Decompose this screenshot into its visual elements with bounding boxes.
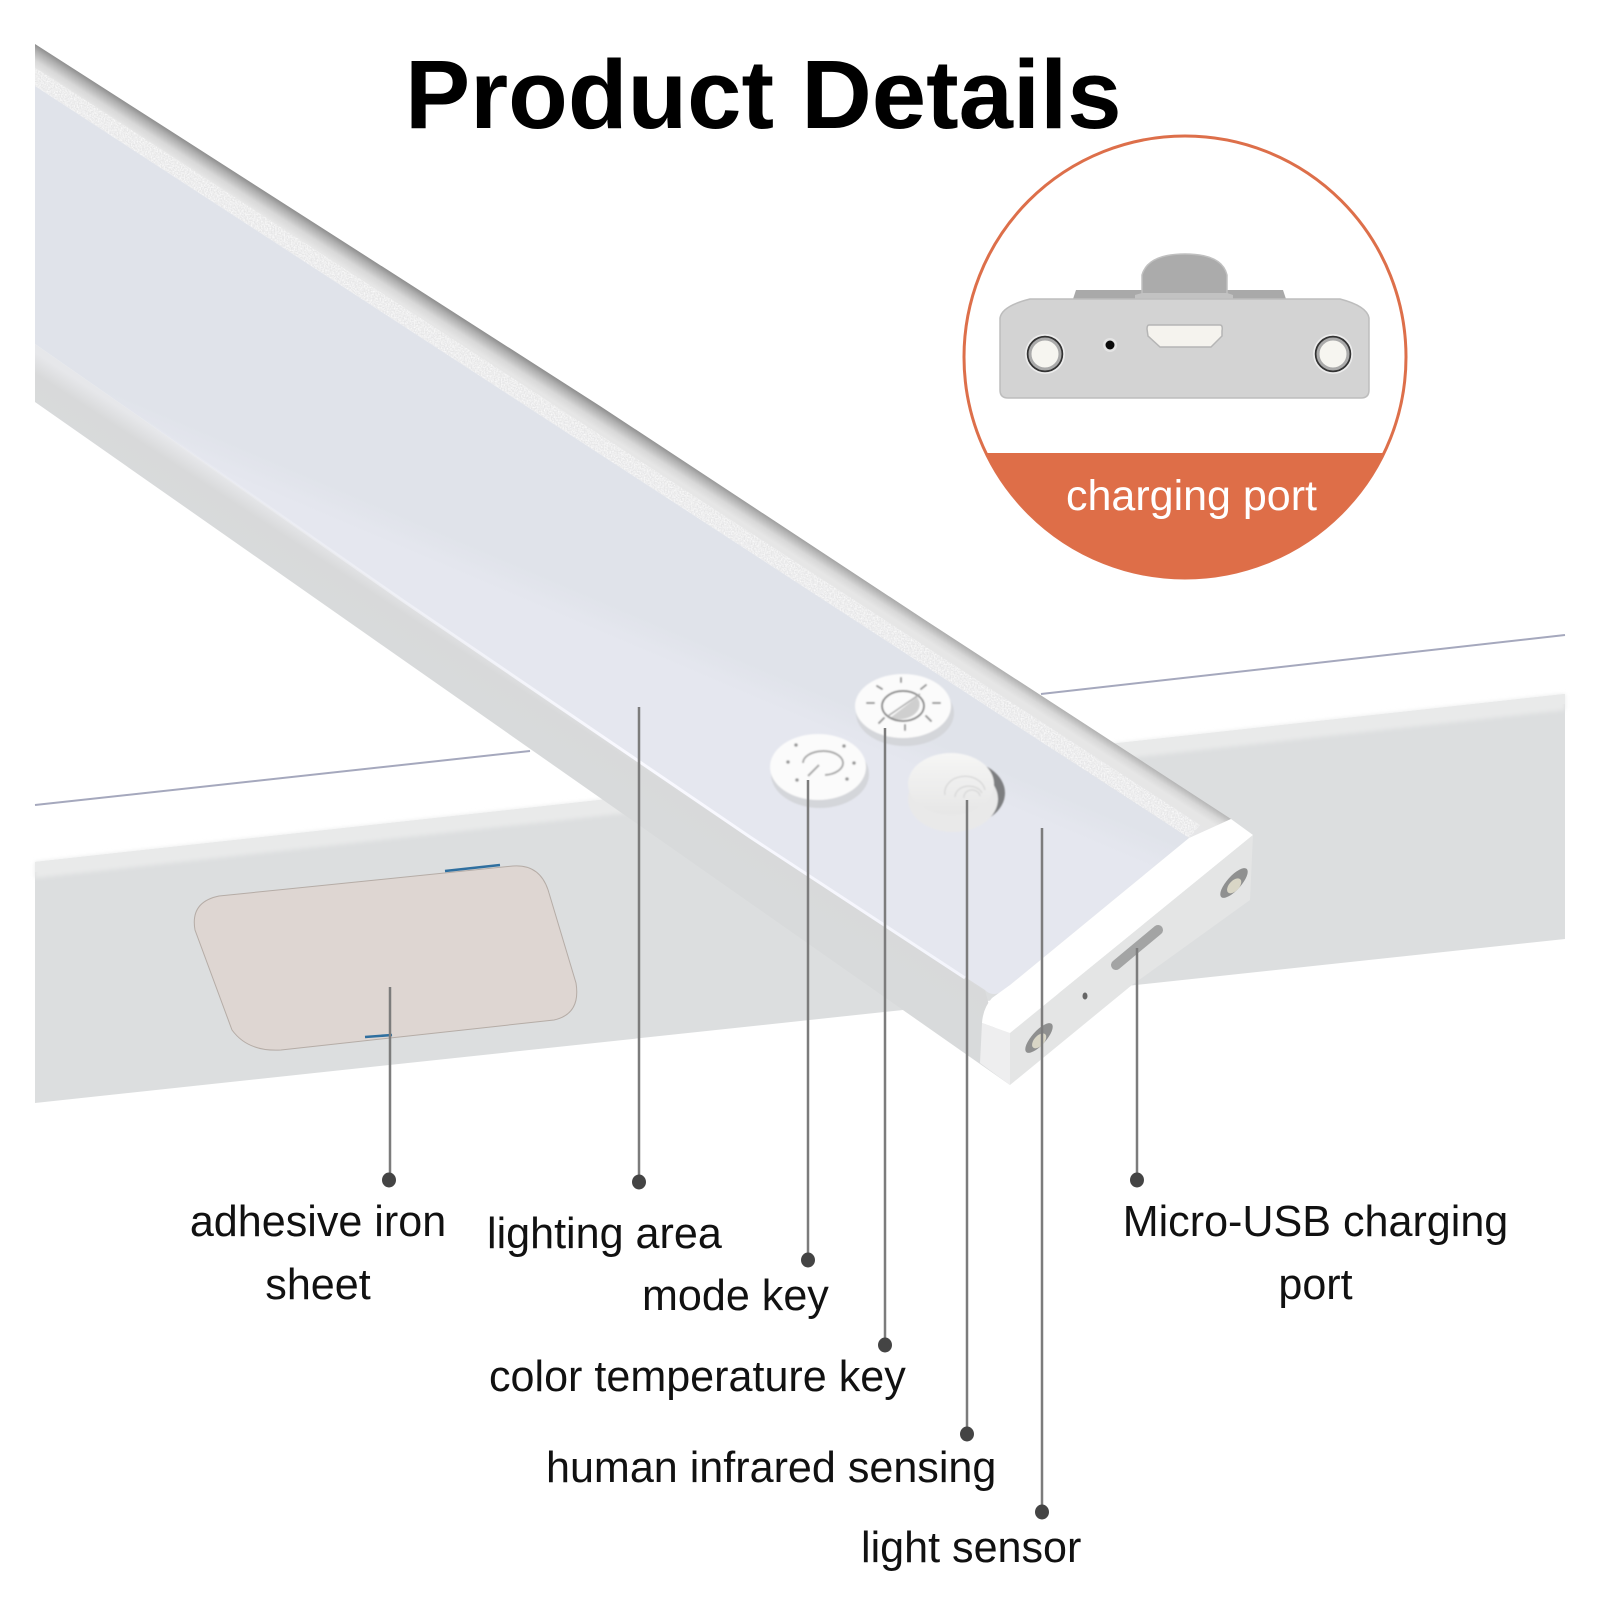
shelf surface — [35, 694, 1565, 1103]
human infrared sensor — [908, 753, 1005, 832]
device end view — [1000, 254, 1369, 398]
bar textured top edge — [35, 44, 1231, 838]
lighting panel — [35, 86, 1189, 994]
label: color temperature key: color temperature key — [489, 1353, 906, 1401]
white end cap — [982, 819, 1253, 1033]
cap lower corner — [980, 1023, 1010, 1085]
label: Micro-USB charging port: port — [1278, 1261, 1353, 1309]
orange banner — [986, 453, 1384, 578]
label: adhesive iron sheet: sheet — [265, 1261, 371, 1309]
bar side face — [35, 344, 1010, 1085]
circle outline — [964, 136, 1406, 578]
adhesive iron sheet — [194, 865, 577, 1050]
wall line behind bar — [35, 635, 1565, 805]
screw hole right — [1216, 864, 1252, 902]
charging port label: charging port — [1066, 472, 1317, 520]
label: adhesive iron sheet: adhesive iron — [190, 1198, 446, 1246]
callout lines — [390, 707, 1137, 1513]
label: light sensor: light sensor — [861, 1524, 1081, 1572]
front end face — [1010, 835, 1253, 1085]
panel highlight — [130, 410, 965, 978]
screw hole left — [1021, 1019, 1057, 1057]
label: Micro-USB charging port: Micro-USB charging — [1123, 1198, 1508, 1246]
callout dots — [382, 1172, 1144, 1520]
pinhole — [1082, 992, 1088, 1000]
label: human infrared sensing: human infrared sensing — [546, 1444, 996, 1492]
mode key — [770, 734, 869, 808]
color temperature key — [855, 674, 954, 746]
light bar — [30, 44, 1253, 1085]
label: mode key: mode key — [642, 1272, 829, 1320]
label: lighting area: lighting area — [487, 1210, 722, 1258]
title: Product Details — [405, 40, 1122, 149]
edge texture — [30, 60, 1210, 850]
charging port callout circle — [964, 136, 1406, 578]
micro usb slot — [1116, 930, 1158, 965]
